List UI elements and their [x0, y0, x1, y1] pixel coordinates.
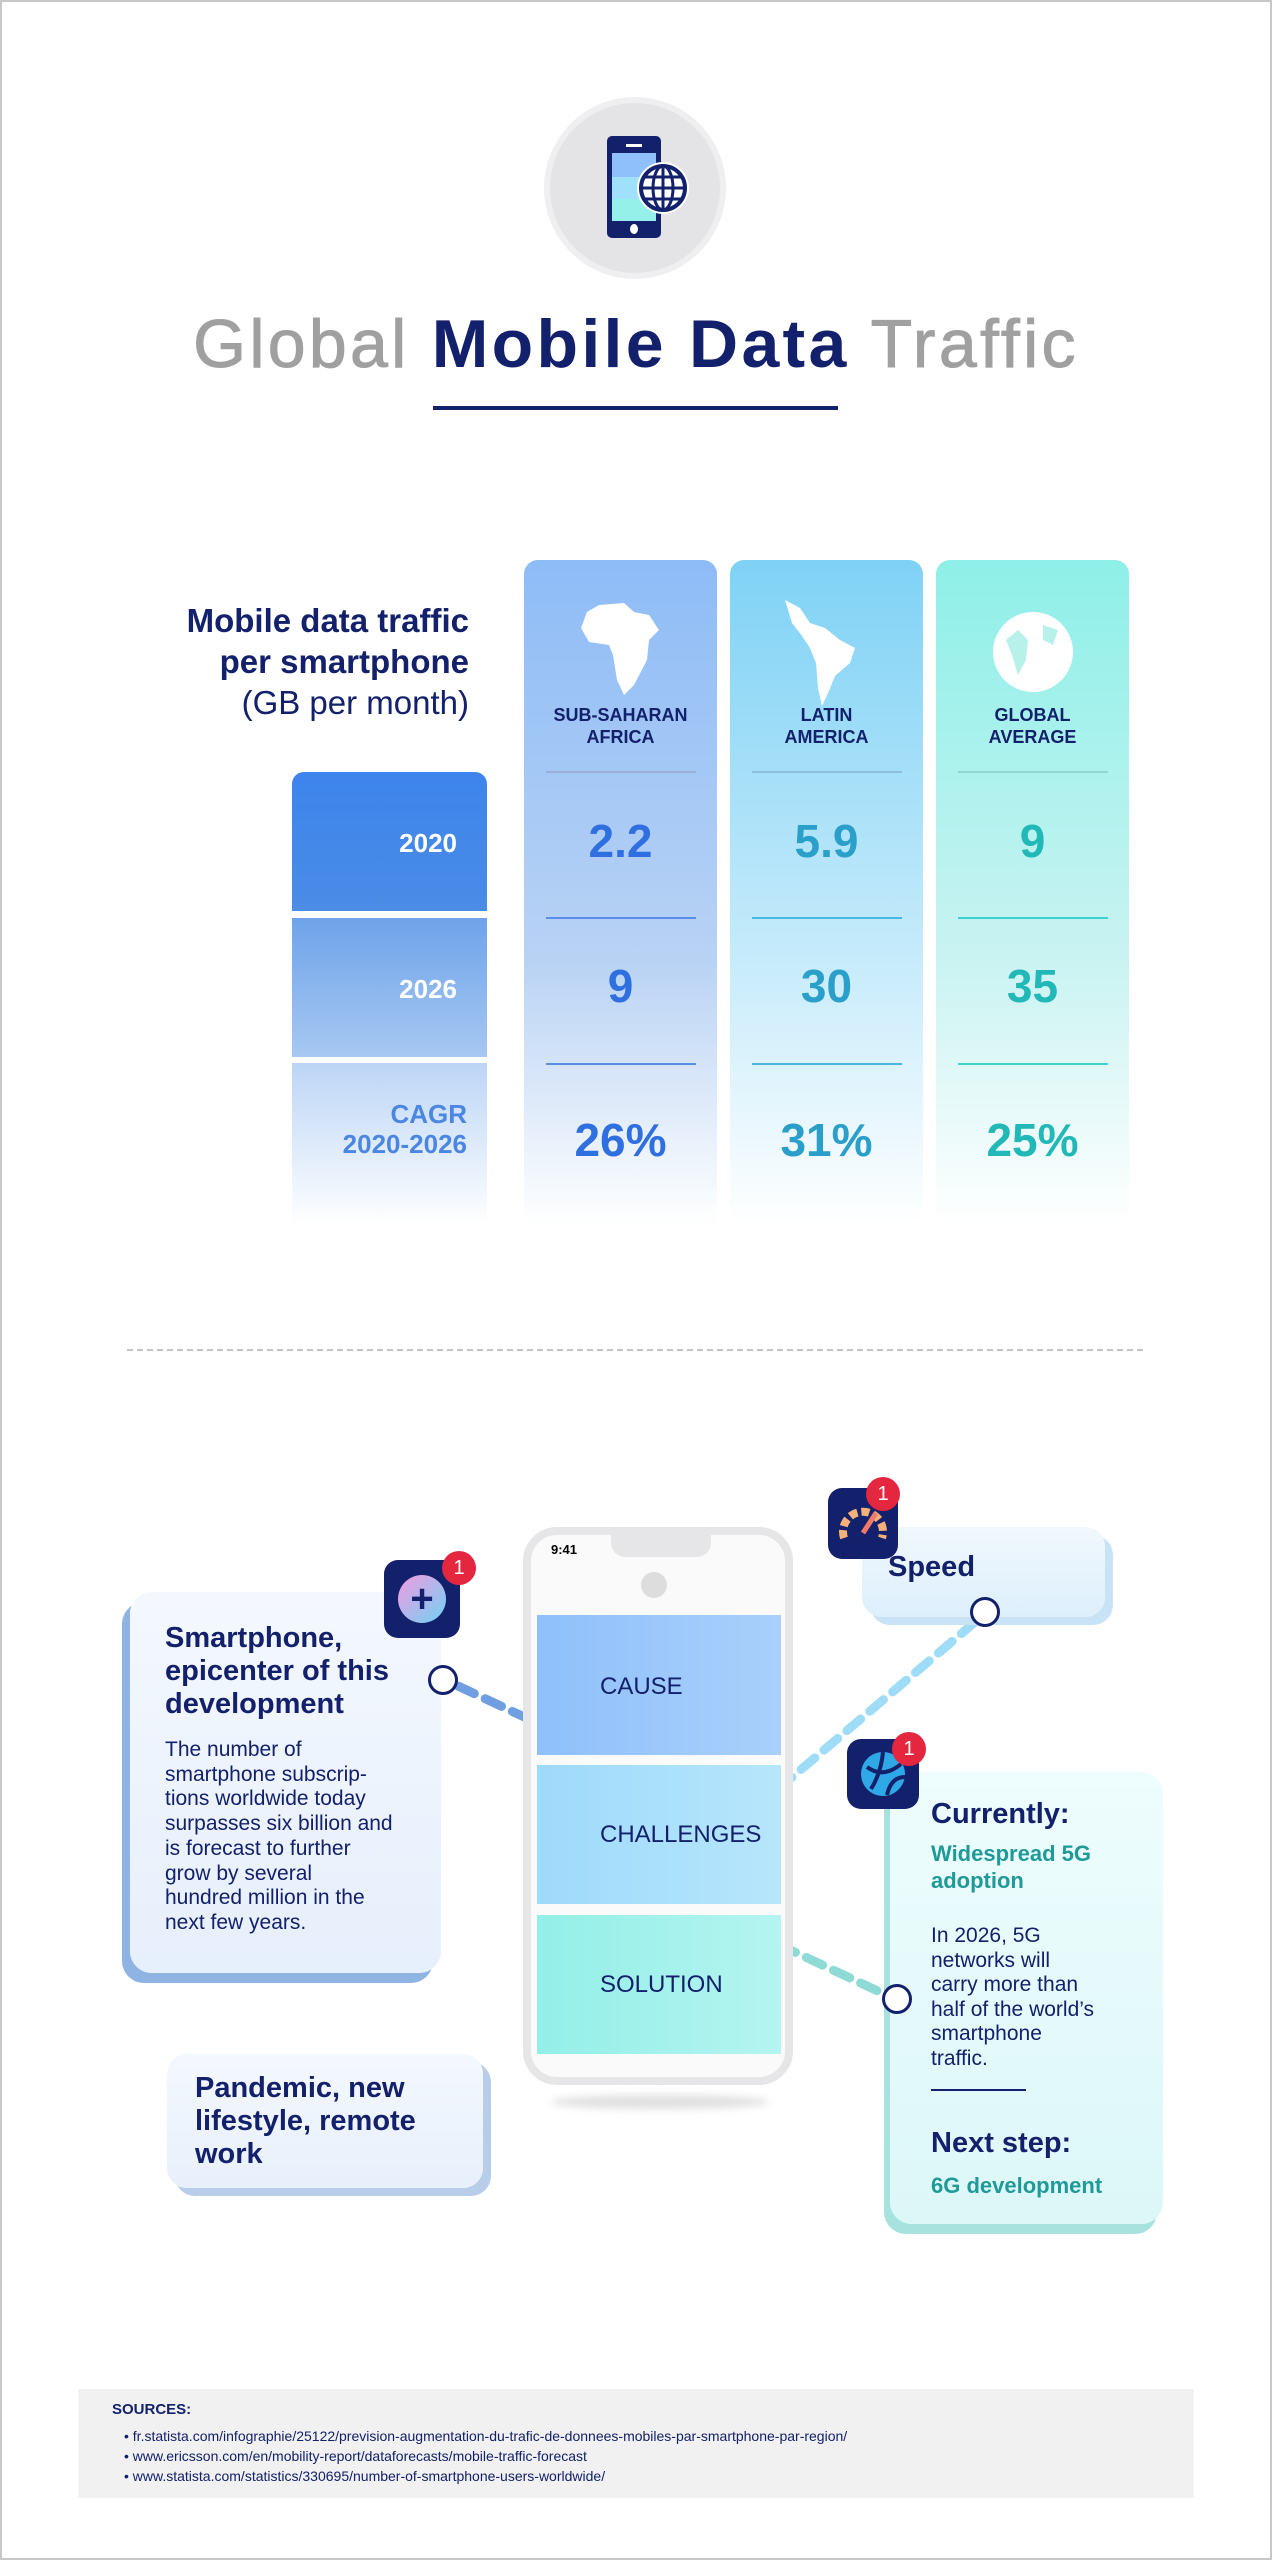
column: Latin America: AMERICA: [784, 727, 868, 747]
column: Sub-Saharan Africa: [524, 560, 717, 1225]
screen: cause: [537, 1615, 781, 1755]
phone mockup: 9:41: [551, 1542, 577, 1557]
card: smartphone epicenter: next few years.: [165, 1911, 306, 1934]
card: smartphone epicenter: The number of: [165, 1738, 302, 1761]
column: Latin America: 5.9: [795, 815, 858, 867]
card: speed: [862, 1527, 1105, 1617]
column: Global Average: 35: [1007, 960, 1058, 1012]
card: currently / next step: half of the world’s: [931, 1998, 1094, 2020]
card: currently / next step: In 2026, 5G: [931, 1924, 1041, 1947]
card: smartphone epicenter: [130, 1592, 441, 1973]
card: smartphone epicenter: tions worldwide today: [165, 1787, 366, 1810]
column: Sub-Saharan Africa: 2.2: [589, 815, 652, 867]
card: smartphone epicenter: hundred million in the: [165, 1886, 365, 1909]
row labels column: CAGR: [390, 1099, 467, 1129]
card: smartphone epicenter: Smartphone,: [165, 1622, 342, 1654]
row labels column: 2026: [399, 974, 457, 1004]
card: currently / next step: [890, 1772, 1163, 2224]
card: currently / next step: carry more than: [931, 1973, 1078, 1996]
sources box: [78, 2389, 1194, 2498]
icon: plus app: [384, 1560, 460, 1638]
row labels column: [292, 772, 487, 1206]
sources box: SOURCES:: [112, 2401, 191, 2418]
column: Global Average: 25%: [986, 1114, 1079, 1166]
text: 1: [877, 1483, 889, 1505]
icon: plus app: +: [410, 1577, 434, 1621]
column: Latin America: 31%: [780, 1114, 873, 1166]
column: Sub-Saharan Africa: SUB-SAHARAN: [554, 705, 688, 725]
card: smartphone epicenter: is forecast to further: [165, 1837, 351, 1860]
column: Latin America: LATIN: [801, 705, 852, 725]
heading: mobile data traffic per smartphone: (GB per month): [242, 684, 469, 721]
card: currently / next step: networks will: [931, 1948, 1050, 1972]
screen: solution: SOLUTION: [600, 1971, 723, 1998]
icon: globe app: [847, 1739, 919, 1809]
column: Global Average: [936, 560, 1129, 1225]
row labels column: 2020-2026: [343, 1129, 467, 1159]
card: currently / next step: traffic.: [931, 2046, 988, 2070]
column: Latin America: 30: [801, 960, 852, 1012]
screen: cause: CAUSE: [600, 1673, 683, 1700]
sources box: • www.statista.com/statistics/330695/number-of-smartphone-users-worldwide/: [124, 2468, 605, 2484]
card: pandemic: Pandemic, new: [195, 2072, 405, 2104]
card: smartphone epicenter: smartphone subscrip-: [165, 1763, 367, 1786]
card: currently / next step: Next step:: [931, 2127, 1071, 2159]
card: smartphone epicenter: development: [165, 1688, 344, 1720]
heading: mobile data traffic per smartphone: per smartphone: [220, 643, 469, 680]
column: Sub-Saharan Africa: AFRICA: [586, 727, 654, 747]
card: speed: Speed: [888, 1551, 975, 1583]
column: Global Average: 9: [1020, 815, 1045, 867]
column: Global Average: GLOBAL: [994, 705, 1070, 725]
icon: speedometer: [828, 1488, 898, 1559]
card: smartphone epicenter: surpasses six billion and: [165, 1812, 393, 1835]
card: currently / next step: Widespread 5G: [931, 1841, 1091, 1866]
text: 1: [453, 1557, 465, 1579]
card: currently / next step: Currently:: [931, 1798, 1070, 1830]
screen: challenges: [537, 1765, 781, 1904]
card: pandemic: [167, 2054, 483, 2188]
icon: phone with globe header: [544, 97, 726, 279]
column: Sub-Saharan Africa: 9: [608, 960, 633, 1012]
card: pandemic: lifestyle, remote: [195, 2105, 416, 2137]
heading: mobile data traffic per smartphone: [187, 602, 469, 721]
card: currently / next step: adoption: [931, 1868, 1024, 1893]
screen: solution: [537, 1915, 781, 2054]
title: Global Mobile Data Traffic: [193, 306, 1079, 382]
heading: mobile data traffic per smartphone: Mobile data traffic: [187, 602, 469, 639]
text: 1: [903, 1738, 915, 1760]
column: Latin America: [730, 560, 923, 1225]
row labels column: 2020: [399, 828, 457, 858]
card: currently / next step: 6G development: [931, 2173, 1102, 2198]
card: currently / next step: smartphone: [931, 2022, 1042, 2045]
column: Sub-Saharan Africa: 26%: [574, 1114, 667, 1166]
card: smartphone epicenter: epicenter of this: [165, 1655, 389, 1687]
phone mockup: [523, 1527, 793, 2085]
card: smartphone epicenter: grow by several: [165, 1862, 312, 1885]
screen: challenges: CHALLENGES: [600, 1821, 761, 1848]
sources box: • www.ericsson.com/en/mobility-report/dataforecasts/mobile-traffic-forecast: [124, 2448, 587, 2464]
column: Global Average: AVERAGE: [989, 727, 1076, 747]
card: pandemic: work: [195, 2138, 263, 2170]
sources box: • fr.statista.com/infographie/25122/prevision-augmentation-du-trafic-de-donnees-mobiles-par-smartphone-par-region/: [124, 2428, 847, 2444]
